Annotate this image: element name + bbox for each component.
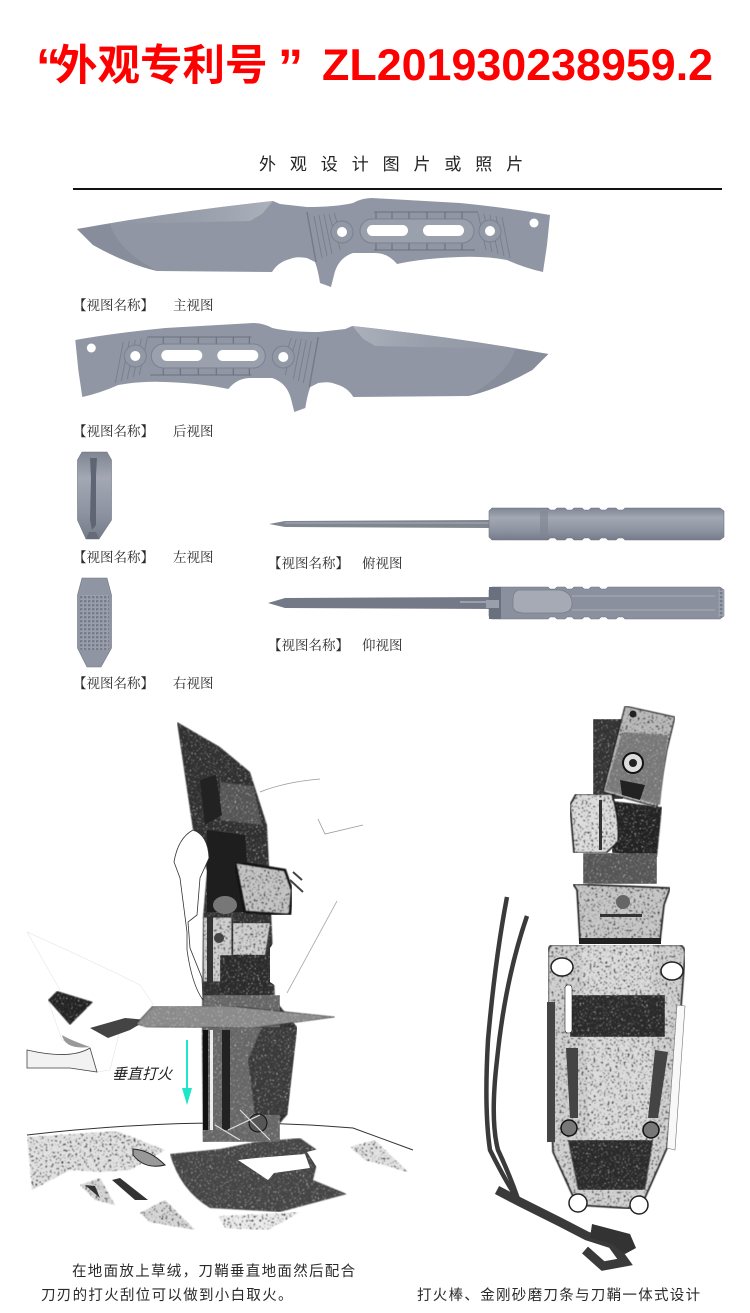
label value: left view: 左视图	[173, 550, 214, 565]
title: “	[36, 39, 61, 95]
left hand and knife	[27, 932, 335, 1072]
label: vertical strike: 垂直打火	[112, 1066, 173, 1083]
caption: left illustration: 刀刃的打火刮位可以做到小白取火。	[41, 1287, 294, 1304]
lanyard cords	[486, 897, 625, 1266]
belt buckle	[235, 862, 292, 915]
caption: right illustration: 打火棒、金刚砂磨刀条与刀鞘一体式设计	[417, 1287, 701, 1304]
title: ZL201930238959.2	[322, 40, 713, 90]
label: rear view: 【视图名称】	[73, 424, 154, 439]
sheath plate	[547, 884, 685, 1214]
knife: front view	[77, 198, 550, 287]
ground	[27, 1123, 413, 1230]
label: bottom view: 【视图名称】	[268, 638, 349, 653]
label value: front view: 主视图	[173, 298, 214, 313]
tinder grass	[170, 1138, 352, 1212]
label value: right view: 右视图	[173, 676, 214, 691]
label: top view: 【视图名称】	[268, 556, 349, 571]
knife: right view	[78, 578, 112, 667]
heading: design photos: 外观设计图片或照片	[259, 155, 537, 174]
caption: left illustration	[41, 1263, 356, 1304]
label value: rear view: 后视图	[173, 424, 214, 439]
illustration: fire starting with sheath	[27, 722, 413, 1230]
label value: bottom view: 仰视图	[362, 638, 402, 653]
title: ”	[278, 39, 303, 95]
knife: left view	[78, 452, 112, 539]
knife: top view	[269, 508, 724, 540]
label: right view: 【视图名称】	[73, 676, 154, 691]
caption: left illustration: 在地面放上草绒，刀鞘垂直地面然后配合	[72, 1263, 356, 1280]
label: front view: 【视图名称】	[73, 298, 154, 313]
arrow: downward	[182, 1040, 192, 1105]
title	[36, 39, 713, 95]
sheath	[177, 722, 303, 1142]
title: 外观专利号	[55, 43, 268, 90]
strap and handle	[593, 706, 675, 807]
belt clip	[570, 794, 662, 884]
ferro rod	[590, 1224, 636, 1254]
label: left view: 【视图名称】	[73, 550, 154, 565]
knife: rear view	[75, 323, 548, 412]
label value: top view: 俯视图	[362, 556, 402, 571]
holding hand	[174, 779, 363, 1000]
illustration: sheath with ferro rod	[486, 706, 685, 1266]
knife: bottom view	[268, 587, 724, 619]
